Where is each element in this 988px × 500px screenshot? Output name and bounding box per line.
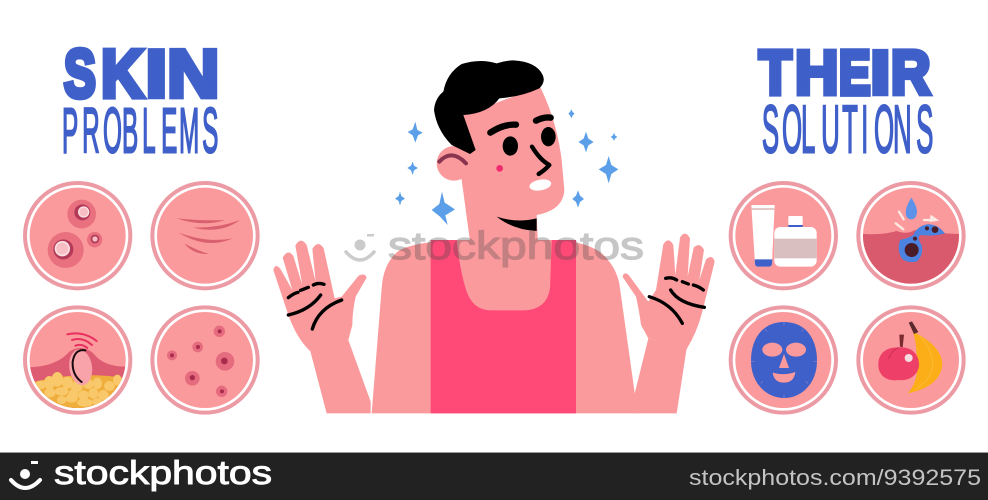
icon: wrinkles (150, 181, 260, 290)
heading word: their: H (795, 38, 838, 107)
icon: pore cleansing cross-section (856, 181, 966, 290)
icon: ingrown hair cross-section (23, 305, 132, 415)
hair (434, 60, 544, 154)
pimple (496, 165, 503, 172)
chin shadow (497, 217, 537, 231)
head (395, 60, 618, 253)
watermark (346, 225, 644, 268)
body, arms and tank top (273, 234, 715, 413)
heading word: skin: N (167, 35, 220, 111)
heading word: skin: I (145, 35, 168, 111)
heading word: their (759, 38, 930, 108)
icon: cream tube and bottle (729, 181, 838, 290)
right arm and hand (623, 234, 715, 413)
footer brand name: stockphotos (54, 454, 272, 491)
watermark logo (346, 234, 374, 260)
heading: their solutions (759, 38, 933, 167)
ear (437, 146, 471, 181)
heading word: skin: K (101, 35, 144, 112)
figure: man with raised hands (273, 60, 715, 413)
tank top (431, 240, 576, 413)
footer image url: stockphotos.com/9392575 (689, 465, 981, 490)
left arm and hand (273, 241, 371, 413)
heading word: their: I (870, 38, 891, 108)
mouth (529, 178, 552, 192)
heading word: their: T (759, 39, 792, 108)
watermark text: stockphotos (388, 225, 644, 268)
eyebrows (490, 117, 551, 133)
heading word: their: R (891, 39, 930, 108)
heading word: skin (64, 35, 220, 112)
icon: red spots (150, 305, 260, 415)
heading: skin problems (62, 35, 220, 167)
icon: acne pimples (23, 181, 132, 290)
icon: apple and banana (856, 305, 966, 415)
icon: sheet face mask (729, 305, 838, 415)
footer logo (11, 461, 40, 488)
panel: solution icons (729, 181, 966, 415)
torso (372, 240, 635, 413)
nose (532, 147, 549, 174)
face and neck (462, 87, 564, 253)
heading word: solutions: SOLUTIONS (762, 90, 933, 167)
panel: skin problem icons (23, 181, 260, 415)
sparkles (395, 109, 618, 225)
heading word: skin: S (64, 37, 96, 112)
heading word: their: E (839, 38, 870, 108)
heading word: problems: PROBLEMS (62, 96, 218, 167)
eyes (503, 127, 556, 156)
footer bar (0, 452, 988, 500)
